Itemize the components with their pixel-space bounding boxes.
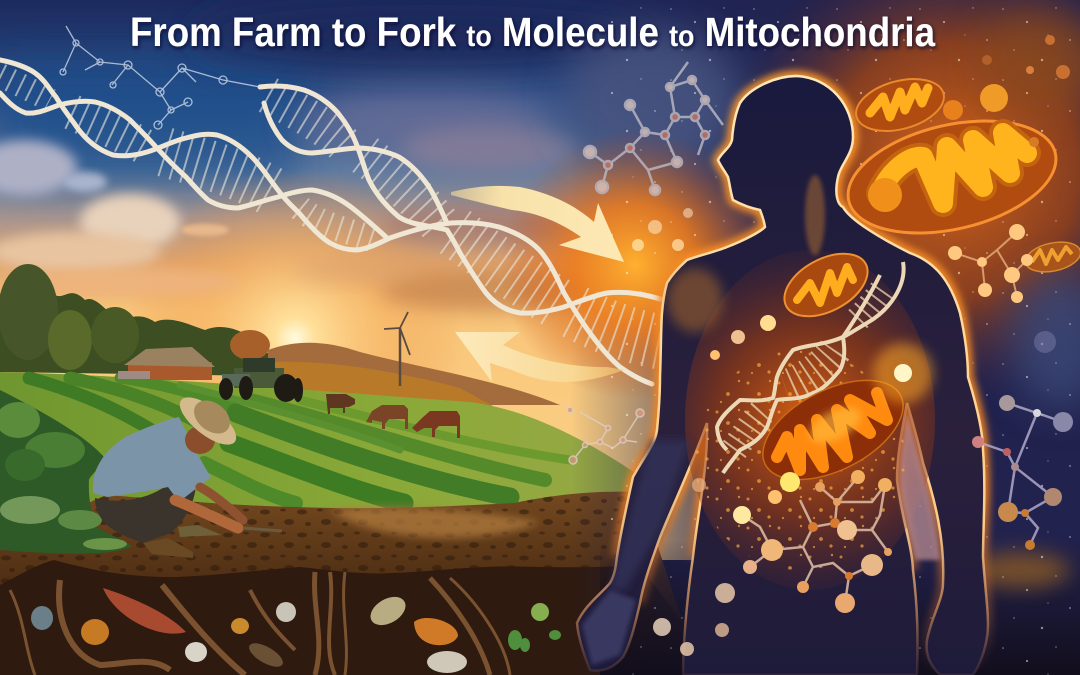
mitochondrion: right small [1023, 237, 1080, 277]
sweet potato [103, 588, 186, 634]
ginger [81, 619, 109, 645]
outer glow [617, 76, 988, 675]
mitochondrion: lower [747, 360, 919, 500]
mitochondrion: large [837, 102, 1067, 252]
molecule in lower torso [742, 470, 892, 613]
head [185, 426, 215, 454]
gap between torso and arm [899, 410, 940, 560]
neck glow [805, 175, 825, 255]
molecule over field [567, 407, 644, 464]
arm tone left [610, 440, 690, 590]
soil cross-section [0, 492, 720, 675]
white crystals [185, 642, 207, 662]
energy particles and orbs [632, 35, 1070, 656]
body fill [577, 76, 988, 675]
trees [0, 264, 272, 376]
embers [695, 350, 905, 570]
molecule lower right network [972, 395, 1073, 550]
distant hills [268, 343, 560, 410]
molecule upper left of head [584, 62, 723, 195]
molecule network top-left [60, 26, 260, 129]
trowel [243, 528, 282, 531]
clouds [0, 5, 670, 312]
shirt [93, 417, 211, 502]
mitochondrion: top small [850, 70, 950, 140]
white fungus cluster [427, 651, 467, 673]
chest glow [685, 250, 935, 590]
seedling [508, 603, 561, 652]
crop rows [29, 378, 570, 503]
wind turbine [384, 312, 410, 386]
mitochondrion: chest [774, 241, 878, 329]
cows [326, 394, 460, 438]
molecule upper right network [948, 224, 1033, 303]
flat stone [246, 639, 286, 671]
dark cosmic right background [490, 0, 1080, 675]
shoulder muscle glow [667, 268, 723, 332]
farmer [93, 389, 282, 558]
far arm [200, 487, 243, 520]
foreground leafy plants [0, 390, 132, 554]
orange mushroom cup [414, 618, 458, 645]
white crystals small [276, 602, 296, 622]
barn [118, 347, 215, 380]
arrow: toward farm [455, 332, 624, 382]
golden piece [231, 618, 249, 634]
front boot [143, 538, 193, 558]
human figure [577, 76, 988, 675]
grey stone [31, 606, 53, 630]
hand tone left [582, 590, 636, 665]
roots and underground items [10, 572, 561, 675]
DNA helix [0, 60, 663, 384]
stone [366, 591, 410, 631]
arms [175, 500, 238, 528]
arrow: toward body [451, 186, 624, 262]
trousers [95, 465, 196, 543]
field [0, 372, 660, 530]
hat crown [188, 394, 236, 440]
rear boot [178, 525, 222, 537]
title: From Farm to Fork to Molecule to Mitochondria [130, 9, 936, 55]
body DNA [717, 262, 904, 473]
hat brim [173, 389, 243, 453]
tractor [219, 358, 303, 402]
